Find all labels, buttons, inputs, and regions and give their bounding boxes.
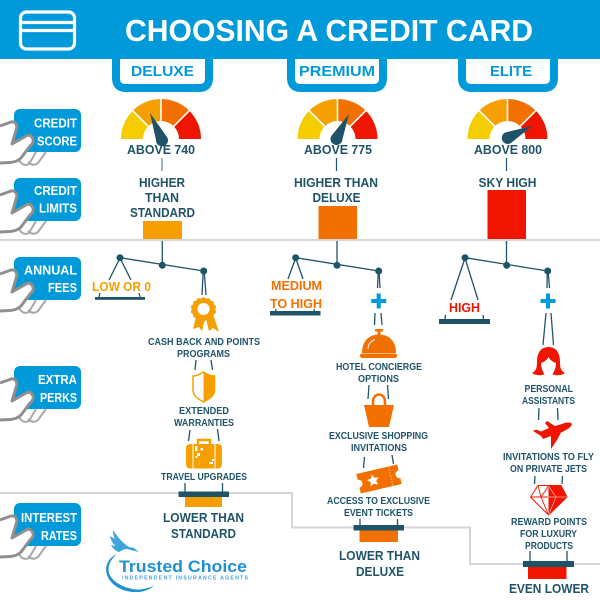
deluxe column: interest rate bar [163,483,244,541]
deluxe column: fee scale: LOW OR 0 [92,279,151,294]
icon: plus [540,294,556,308]
elite column: fee scale [439,241,551,324]
tab: premium: PREMIUM [299,63,375,80]
swoosh [106,554,154,592]
row label: extra perks: EXTRA [38,373,77,387]
icon: event ticket [356,465,402,493]
tab: deluxe: DELUXE [131,63,194,80]
tab: premium [291,59,383,88]
elite column: credit score gauge: ABOVE 800 [474,143,542,157]
elite column: credit limit [478,176,536,239]
premium column: credit limit: HIGHER THAN [294,176,378,190]
elite column: interest rate bar [509,551,589,596]
grey divider lines [0,240,600,564]
text: invitations to fly on private jets: ON PRIVATE JETS [510,464,587,475]
premium column: credit score gauge [298,99,378,171]
tab: elite: ELITE [490,63,532,80]
row label: interest rates: RATES [41,529,77,543]
row label: credit score [0,109,81,165]
row label: extra perks: PERKS [40,391,77,405]
row label: extra perks [0,366,81,422]
text: extended warranties: WARRANTIES [174,418,234,429]
elite column: credit score gauge [468,99,548,171]
text: hotel concierge options: OPTIONS [358,374,399,385]
icon: shield [193,372,215,402]
header band [0,0,600,59]
premium column: interest rate bar [339,519,420,579]
icon: award ribbon [191,297,219,332]
icon: personal assistant [532,347,565,375]
text: extended warranties [174,406,234,429]
logo: trusted choice: Trusted Choice [119,557,247,576]
icon: hotel concierge bell [360,329,397,358]
text: reward points for luxury products: PRODUCTS [525,541,573,552]
text: exclusive shopping invitations [329,431,428,454]
row label: annual fees [0,257,81,313]
premium column: interest rate bar: DELUXE [356,565,404,579]
deluxe column: credit limit: HIGHER [139,176,185,190]
text: hotel concierge options: HOTEL CONCIERGE [336,362,422,373]
premium column: credit limit: DELUXE [312,191,360,205]
logo: trusted choice: INDEPENDENT INSURANCE AGENTS [122,576,249,582]
icon: suitcase [186,440,222,468]
title: CHOOSING A CREDIT CARD [125,13,533,48]
premium column: fee scale: MEDIUM [271,278,322,293]
premium column: credit limit [294,176,378,239]
icon: plus [371,294,386,308]
text: exclusive shopping invitations: INVITATIONS [351,443,407,454]
text: cash back and points programs [148,337,260,360]
elite column: interest rate bar: EVEN LOWER [509,582,589,596]
deluxe column: credit score gauge [121,99,201,171]
deluxe column: credit limit [130,176,195,239]
text: personal assistants: ASSISTANTS [522,396,575,407]
text: access to exclusive event tickets: EVENT TICKETS [344,508,413,519]
row label: credit score: SCORE [37,134,77,148]
row label: credit limits [0,178,81,234]
deluxe column: fee scale [92,241,207,300]
text: reward points for luxury products: FOR LUXURY [520,529,577,540]
text: travel upgrades: TRAVEL UPGRADES [161,472,247,483]
tab: deluxe [116,59,209,88]
row label: interest rates [0,503,81,559]
premium column: fee scale: TO HIGH [270,296,322,311]
deluxe column: interest rate bar: STANDARD [171,527,236,541]
elite column: fee scale: HIGH [449,300,480,315]
elite column: credit limit: SKY HIGH [478,176,536,190]
text: cash back and points programs: PROGRAMS [177,349,230,360]
text: exclusive shopping invitations: EXCLUSIVE SHOPPING [329,431,428,442]
text: personal assistants [522,384,575,407]
tab: elite [462,59,554,88]
premium column: fee scale [270,241,382,316]
row label: credit limits: CREDIT [34,184,77,198]
logo: trusted choice [106,530,249,592]
icon: shopping bag [364,394,394,427]
row label: credit limits: LIMITS [39,202,77,216]
text: invitations to fly on private jets: INVITATIONS TO FLY [503,452,594,463]
row label: credit score: CREDIT [34,116,77,130]
text: personal assistants: PERSONAL [524,384,573,395]
text: access to exclusive event tickets: ACCESS TO EXCLUSIVE [327,496,430,507]
icon: credit card [20,12,74,49]
row label: annual fees: FEES [48,281,77,295]
icon: eagle [110,530,139,552]
deluxe column: credit limit: THAN [145,191,179,205]
premium column: interest rate bar: LOWER THAN [339,549,420,563]
text: invitations to fly on private jets [503,452,594,475]
text: access to exclusive event tickets [327,496,430,519]
row label: annual fees: ANNUAL [24,264,77,278]
row label: interest rates: INTEREST [21,511,77,525]
icon: airplane [533,421,572,449]
premium column: credit score gauge: ABOVE 775 [304,143,372,157]
text: hotel concierge options [336,362,422,385]
deluxe column: credit limit: STANDARD [130,206,195,220]
deluxe column: interest rate bar: LOWER THAN [163,511,244,525]
icon: ruby diamond [530,486,567,515]
text: reward points for luxury products: REWARD POINTS [511,517,587,528]
text: extended warranties: EXTENDED [179,406,229,417]
text: reward points for luxury products [511,517,587,552]
text: cash back and points programs: CASH BACK AND POINTS [148,337,260,348]
deluxe column: credit score gauge: ABOVE 740 [127,143,195,157]
